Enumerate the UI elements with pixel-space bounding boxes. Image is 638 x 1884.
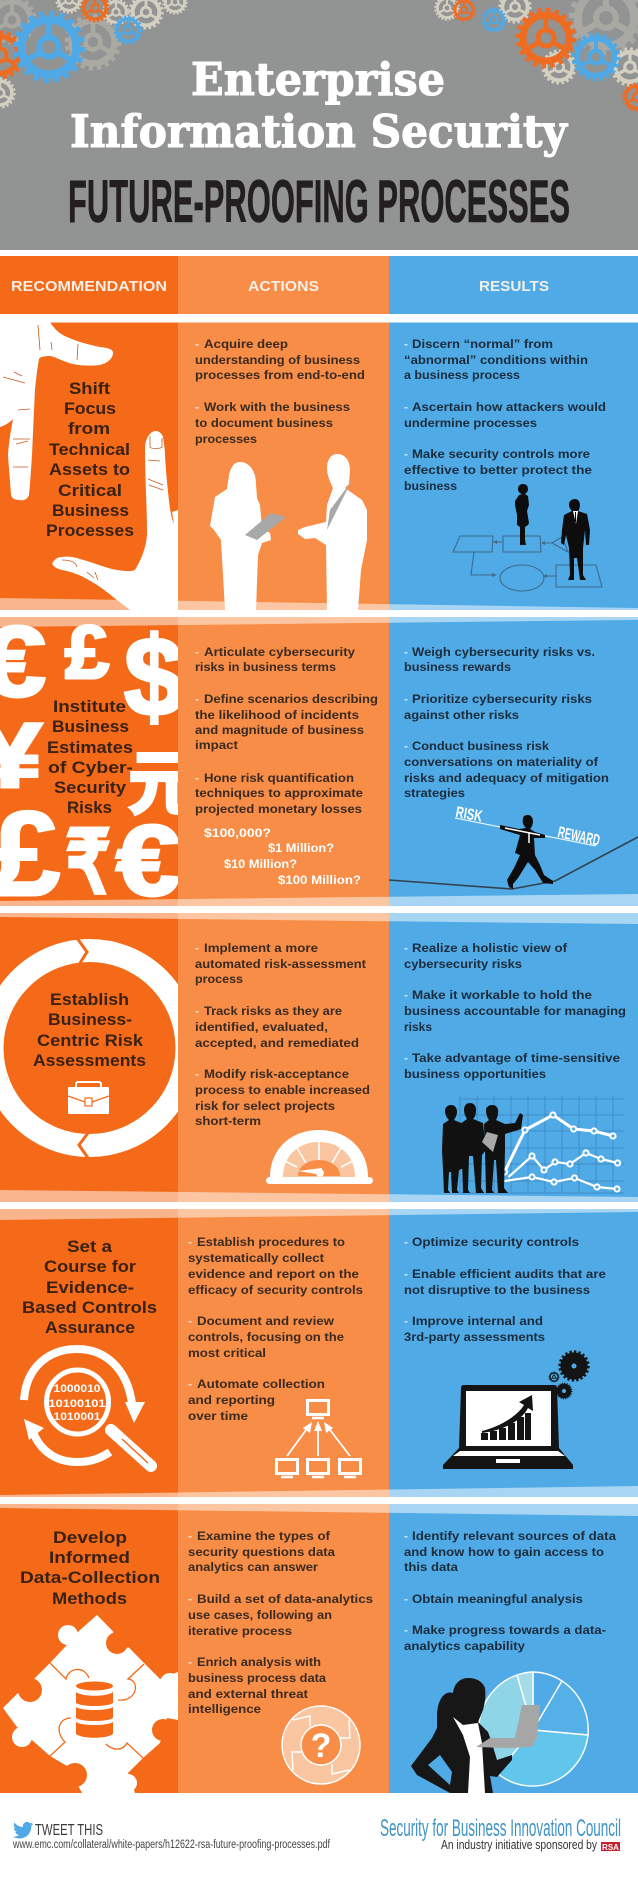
icon: laptop with growth chart and gears — [443, 1352, 588, 1469]
actions text 4: Document and review — [197, 1314, 334, 1328]
actions text 5: - — [188, 1529, 192, 1543]
actions text 2: the likelihood of incidents — [195, 708, 359, 722]
results text 5: Make progress towards a data- — [412, 1623, 606, 1637]
heading: set a course: Based Controls — [22, 1298, 157, 1317]
actions text 4: Establish procedures to — [197, 1235, 346, 1249]
icon: framing hands — [0, 322, 178, 610]
actions text 5 — [188, 1529, 373, 1716]
icon: magnifier with binary data: 10100101 — [48, 1398, 106, 1410]
results text 5: and know how to gain access to — [404, 1545, 605, 1559]
actions text 2: and magnitude of business — [195, 723, 364, 737]
heading: shift focus: Critical — [58, 481, 122, 500]
results text 2: conversations on materiality of — [404, 755, 599, 769]
illustration: tightrope risk reward: REWARD — [556, 823, 602, 849]
icon: cycle ring — [0, 938, 187, 1158]
results text 4: - — [404, 1267, 408, 1281]
actions text 4 — [188, 1235, 363, 1423]
results text 3: Realize a holistic view of — [412, 941, 568, 955]
actions text 1: - — [195, 337, 199, 351]
footer: tweet this: TWEET THIS — [35, 1822, 103, 1839]
actions text 1 — [195, 337, 365, 446]
icon: question cycle — [282, 1706, 360, 1784]
actions text 4: over time — [188, 1409, 248, 1423]
results text 1: effective to better protect the — [404, 463, 592, 477]
heading: institute business estimates — [47, 697, 133, 817]
heading: establish business-centric — [33, 990, 146, 1070]
heading: shift focus — [46, 379, 134, 540]
title: Information Security — [70, 105, 569, 158]
results text 4: - — [404, 1235, 408, 1249]
results text 1: a business process — [404, 368, 520, 382]
heading: establish business-centric: Centric Risk — [37, 1031, 144, 1050]
illustration: tightrope risk reward: RISK — [454, 802, 484, 825]
results text 1: “abnormal” conditions within — [404, 353, 588, 367]
actions text 4: Automate collection — [197, 1377, 325, 1391]
results text 2: against other risks — [404, 708, 519, 722]
actions text 3: - — [195, 1067, 199, 1081]
actions text 4: and reporting — [188, 1393, 275, 1407]
results text 4: not disruptive to the business — [404, 1283, 590, 1297]
actions text 3: risk for select projects — [195, 1099, 335, 1113]
illustration: two business people — [210, 454, 367, 610]
illustration: woman with laptop — [411, 1678, 540, 1793]
actions text 2 — [195, 645, 378, 816]
results text 4: 3rd-party assessments — [404, 1330, 545, 1344]
results text 2: - — [404, 645, 408, 659]
icon: puzzle with database — [3, 1615, 180, 1793]
results text 4: Improve internal and — [412, 1314, 543, 1328]
results text 2: - — [404, 739, 408, 753]
monetary loss amounts: $100 Million? — [278, 873, 361, 887]
monetary loss amounts — [204, 826, 361, 887]
icon: currency symbols: £ — [65, 610, 109, 694]
results text 3: cybersecurity risks — [404, 957, 522, 971]
heading: establish business-centric: Assessments — [33, 1051, 146, 1070]
icon: question cycle: ? — [311, 1727, 331, 1765]
footer: tweet this — [12, 1822, 331, 1851]
heading: develop informed: Methods — [52, 1589, 127, 1608]
results text 2: Conduct business risk — [412, 739, 549, 753]
heading: set a course: Course for — [44, 1257, 136, 1276]
results text 5: this data — [404, 1560, 458, 1574]
actions text 1: processes from end-to-end — [195, 368, 365, 382]
heading: set a course: Set a — [67, 1237, 113, 1256]
actions text 4: - — [188, 1314, 192, 1328]
icon: magnifier with binary data: 1010001 — [54, 1411, 100, 1423]
actions text 3: - — [195, 941, 199, 955]
heading: establish business-centric: Establish — [50, 990, 129, 1009]
actions text 2: Define scenarios describing — [204, 692, 378, 706]
header background — [0, 0, 638, 250]
actions text 2: Hone risk quantification — [204, 771, 354, 785]
heading: institute business estimates: Security — [54, 778, 127, 797]
results text 5 — [404, 1529, 616, 1653]
actions text 3: process to enable increased — [195, 1083, 370, 1097]
actions text 3: process — [195, 972, 243, 986]
results text 3: - — [404, 941, 408, 955]
actions text 4: efficacy of security controls — [188, 1283, 363, 1297]
actions text 3: Modify risk-acceptance — [204, 1067, 349, 1081]
actions text 5: Examine the types of — [197, 1529, 331, 1543]
heading: shift focus: Business — [52, 501, 129, 520]
results text 5: Identify relevant sources of data — [412, 1529, 616, 1543]
panel: section 5 background — [0, 1504, 638, 1793]
panel: section 3 background — [0, 913, 638, 1202]
icon: magnifier with binary data: 1000010 — [54, 1383, 100, 1395]
results text 2: - — [404, 692, 408, 706]
results text 1 — [404, 337, 606, 493]
heading: develop informed: Develop — [53, 1528, 127, 1547]
actions text 4: systematically collect — [188, 1251, 324, 1265]
actions text 3: Track risks as they are — [204, 1004, 342, 1018]
illustration: flowchart with people — [453, 484, 602, 591]
column headers: RECOMMENDATION — [11, 278, 167, 295]
heading: shift focus: from — [68, 419, 110, 438]
results text 1: Make security controls more — [412, 447, 590, 461]
heading: set a course — [22, 1237, 157, 1337]
results text 1: - — [404, 447, 408, 461]
results text 2: risks and adequacy of mitigation — [404, 771, 609, 785]
results text 5: analytics capability — [404, 1639, 525, 1653]
actions text 4: controls, focusing on the — [188, 1330, 344, 1344]
results text 1: undermine processes — [404, 416, 537, 430]
results text 2: Prioritize cybersecurity risks — [412, 692, 592, 706]
results text 1: - — [404, 400, 408, 414]
actions text 5: use cases, following an — [188, 1608, 332, 1622]
icon: currency symbols — [0, 624, 178, 898]
results text 3: Take advantage of time-sensitive — [412, 1051, 620, 1065]
monetary loss amounts: $100,000? — [204, 826, 271, 840]
results text 2: Weigh cybersecurity risks vs. — [412, 645, 595, 659]
actions text 3: accepted, and remediated — [195, 1036, 359, 1050]
actions text 3: identified, evaluated, — [195, 1020, 328, 1034]
heading: set a course: Evidence- — [46, 1278, 134, 1297]
panel: section 1 background — [0, 322, 638, 610]
results text 2: business rewards — [404, 660, 511, 674]
results text 4: Enable efficient audits that are — [412, 1267, 606, 1281]
results text 3 — [404, 941, 626, 1081]
icon: magnifier with binary data — [24, 1349, 151, 1466]
heading: develop informed: Informed — [49, 1548, 130, 1567]
heading: shift focus: Focus — [64, 399, 116, 418]
footer: council logo — [380, 1815, 621, 1852]
results text 1: Discern “normal” from — [412, 337, 553, 351]
panel: section 4 background — [0, 1209, 638, 1497]
results text 3: - — [404, 1051, 408, 1065]
icon: network of monitors — [276, 1400, 360, 1477]
illustration: tightrope risk reward — [389, 802, 638, 889]
actions text 1: Acquire deep — [204, 337, 288, 351]
actions text 2: techniques to approximate — [195, 786, 363, 800]
results text 3: - — [404, 988, 408, 1002]
actions text 5: Build a set of data-analytics — [197, 1592, 373, 1606]
actions text 2: - — [195, 645, 199, 659]
heading: institute business estimates: Estimates — [47, 738, 133, 757]
results text 4: - — [404, 1314, 408, 1328]
results text 1: Ascertain how attackers would — [412, 400, 606, 414]
actions text 1: Work with the business — [204, 400, 350, 414]
panel: section 2 background — [0, 617, 638, 906]
actions text 3: automated risk-assessment — [195, 957, 366, 971]
actions text 4: most critical — [188, 1346, 266, 1360]
footer: council logo: RSA — [602, 1843, 619, 1852]
heading: institute business estimates: Business — [52, 717, 129, 736]
actions text 5: - — [188, 1655, 192, 1669]
actions text 4: - — [188, 1235, 192, 1249]
actions text 2: Articulate cybersecurity — [204, 645, 355, 659]
results text 5: - — [404, 1529, 408, 1543]
results text 1: business — [404, 479, 457, 493]
actions text 2: impact — [195, 738, 238, 752]
monetary loss amounts: $1 Million? — [268, 841, 334, 855]
column headers: RESULTS — [479, 278, 549, 295]
heading: develop informed — [20, 1528, 160, 1608]
column headers — [0, 256, 638, 314]
heading: shift focus: Assets to — [49, 460, 130, 479]
title — [70, 53, 569, 158]
actions text 1: - — [195, 400, 199, 414]
heading: shift focus: Technical — [49, 440, 130, 459]
results text 2: strategies — [404, 786, 465, 800]
results text 4: Optimize security controls — [412, 1235, 579, 1249]
actions text 5: intelligence — [188, 1702, 261, 1716]
footer: tweet this: www.emc.com/collateral/white-papers/h12622-rsa-future-proofing-processes.pdf — [12, 1839, 331, 1851]
line chart with presenters — [442, 1096, 624, 1193]
heading: establish business-centric: Business- — [48, 1010, 132, 1029]
actions text 5: iterative process — [188, 1624, 292, 1638]
icon: currency symbols: € — [116, 805, 180, 917]
actions text 5: - — [188, 1592, 192, 1606]
actions text 3: - — [195, 1004, 199, 1018]
results text 2 — [404, 645, 609, 800]
icon: currency symbols: $ — [124, 614, 184, 739]
actions text 1: to document business — [195, 416, 333, 430]
actions text 4: - — [188, 1377, 192, 1391]
actions text 1: understanding of business — [195, 353, 360, 367]
column headers: ACTIONS — [248, 278, 319, 295]
results text 3: business accountable for managing — [404, 1004, 626, 1018]
icon: risk gauge — [266, 1130, 373, 1184]
results text 5: Obtain meaningful analysis — [412, 1592, 583, 1606]
actions text 4: evidence and report on the — [188, 1267, 359, 1281]
pie chart — [479, 1672, 588, 1786]
results text 3: Make it workable to hold the — [412, 988, 592, 1002]
actions text 2: - — [195, 692, 199, 706]
results text 5: - — [404, 1592, 408, 1606]
monetary loss amounts: $10 Million? — [224, 857, 297, 871]
icon: gears top right — [436, 0, 638, 110]
actions text 5: business process data — [188, 1671, 326, 1685]
actions text 2: - — [195, 771, 199, 785]
actions text 2: risks in business terms — [195, 660, 336, 674]
actions text 5: analytics can answer — [188, 1560, 318, 1574]
heading: shift focus: Processes — [46, 521, 134, 540]
actions text 5: security questions data — [188, 1545, 335, 1559]
heading: set a course: Assurance — [45, 1318, 135, 1337]
heading: institute business estimates: Risks — [67, 798, 112, 817]
results text 1: - — [404, 337, 408, 351]
heading: develop informed: Data-Collection — [20, 1568, 160, 1587]
heading: institute business estimates: Institute — [53, 697, 126, 716]
results text 3: risks — [404, 1020, 432, 1034]
heading: shift focus: Shift — [69, 379, 110, 398]
icon: briefcase — [68, 1082, 109, 1114]
icon: currency symbols: 元 — [128, 745, 198, 823]
results text 4 — [404, 1235, 606, 1344]
actions text 3 — [195, 941, 370, 1128]
actions text 5: and external threat — [188, 1687, 308, 1701]
heading: institute business estimates: of Cyber- — [48, 758, 133, 777]
actions text 3: short-term — [195, 1114, 261, 1128]
results text 3: business opportunities — [404, 1067, 546, 1081]
title: Enterprise — [191, 53, 445, 106]
actions text 1: processes — [195, 432, 257, 446]
icon: gears top left — [0, 0, 186, 107]
actions text 2: projected monetary losses — [195, 802, 362, 816]
footer: council logo: An industry initiative sponsored by — [441, 1838, 598, 1852]
results text 5: - — [404, 1623, 408, 1637]
icon: currency symbols: ₹ — [66, 815, 110, 911]
actions text 3: Implement a more — [204, 941, 318, 955]
actions text 5: Enrich analysis with — [197, 1655, 321, 1669]
